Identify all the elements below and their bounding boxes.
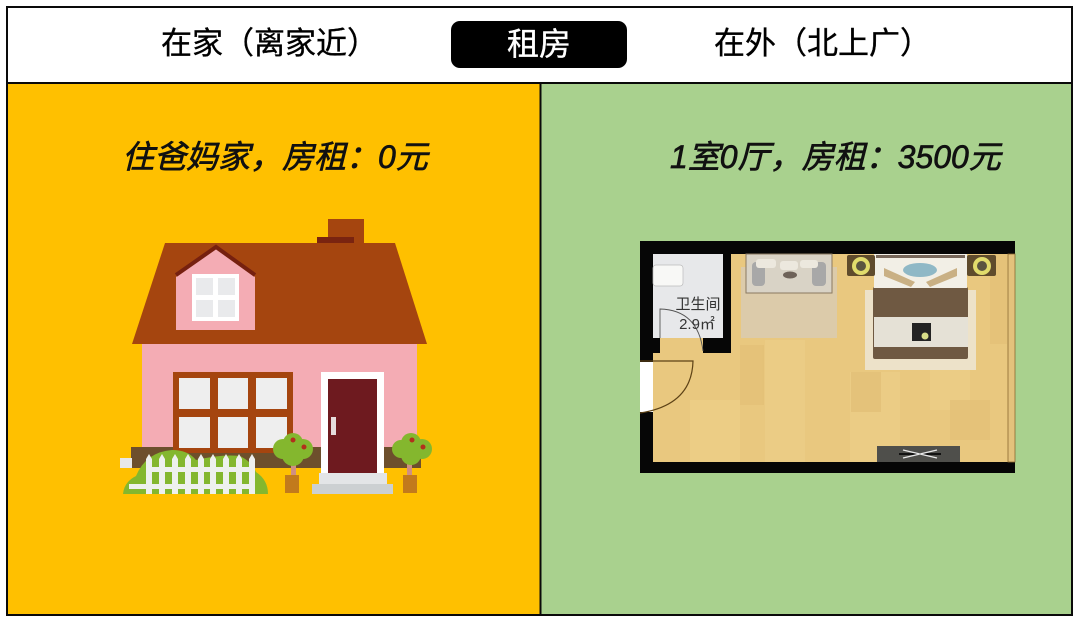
floor plan	[640, 241, 1015, 473]
heading: away from home: 在外（北上广）	[714, 26, 931, 61]
caption: home rent: 住爸妈家，房租：0元	[122, 139, 430, 175]
front window	[173, 372, 293, 453]
steps	[312, 473, 393, 494]
dormer window	[176, 247, 255, 330]
header bar	[7, 7, 1072, 82]
heading: at home: 在家（离家近）	[161, 26, 378, 61]
foundation	[131, 447, 421, 468]
wood floor	[653, 254, 1015, 462]
panel: living at home	[7, 83, 540, 614]
potted tree left	[273, 433, 313, 493]
bathroom	[653, 254, 731, 353]
rug and sofa	[741, 254, 837, 338]
bed and rug	[865, 254, 976, 370]
label: bathroom	[675, 296, 721, 333]
door	[321, 372, 384, 474]
bush and fence	[120, 450, 268, 494]
tab: renting: 租房	[507, 26, 571, 62]
icon: house	[120, 219, 432, 494]
tab: renting	[451, 21, 627, 68]
panel: living away	[541, 83, 1072, 614]
tv unit	[877, 446, 960, 462]
caption: away rent: 1室0厅，房租：3500元	[670, 139, 1003, 175]
label: bathroom: 2.9㎡	[679, 316, 715, 333]
label: bathroom: 卫生间	[675, 296, 721, 313]
potted tree right	[392, 433, 432, 493]
entry door	[640, 361, 693, 413]
nightstands	[847, 255, 996, 276]
